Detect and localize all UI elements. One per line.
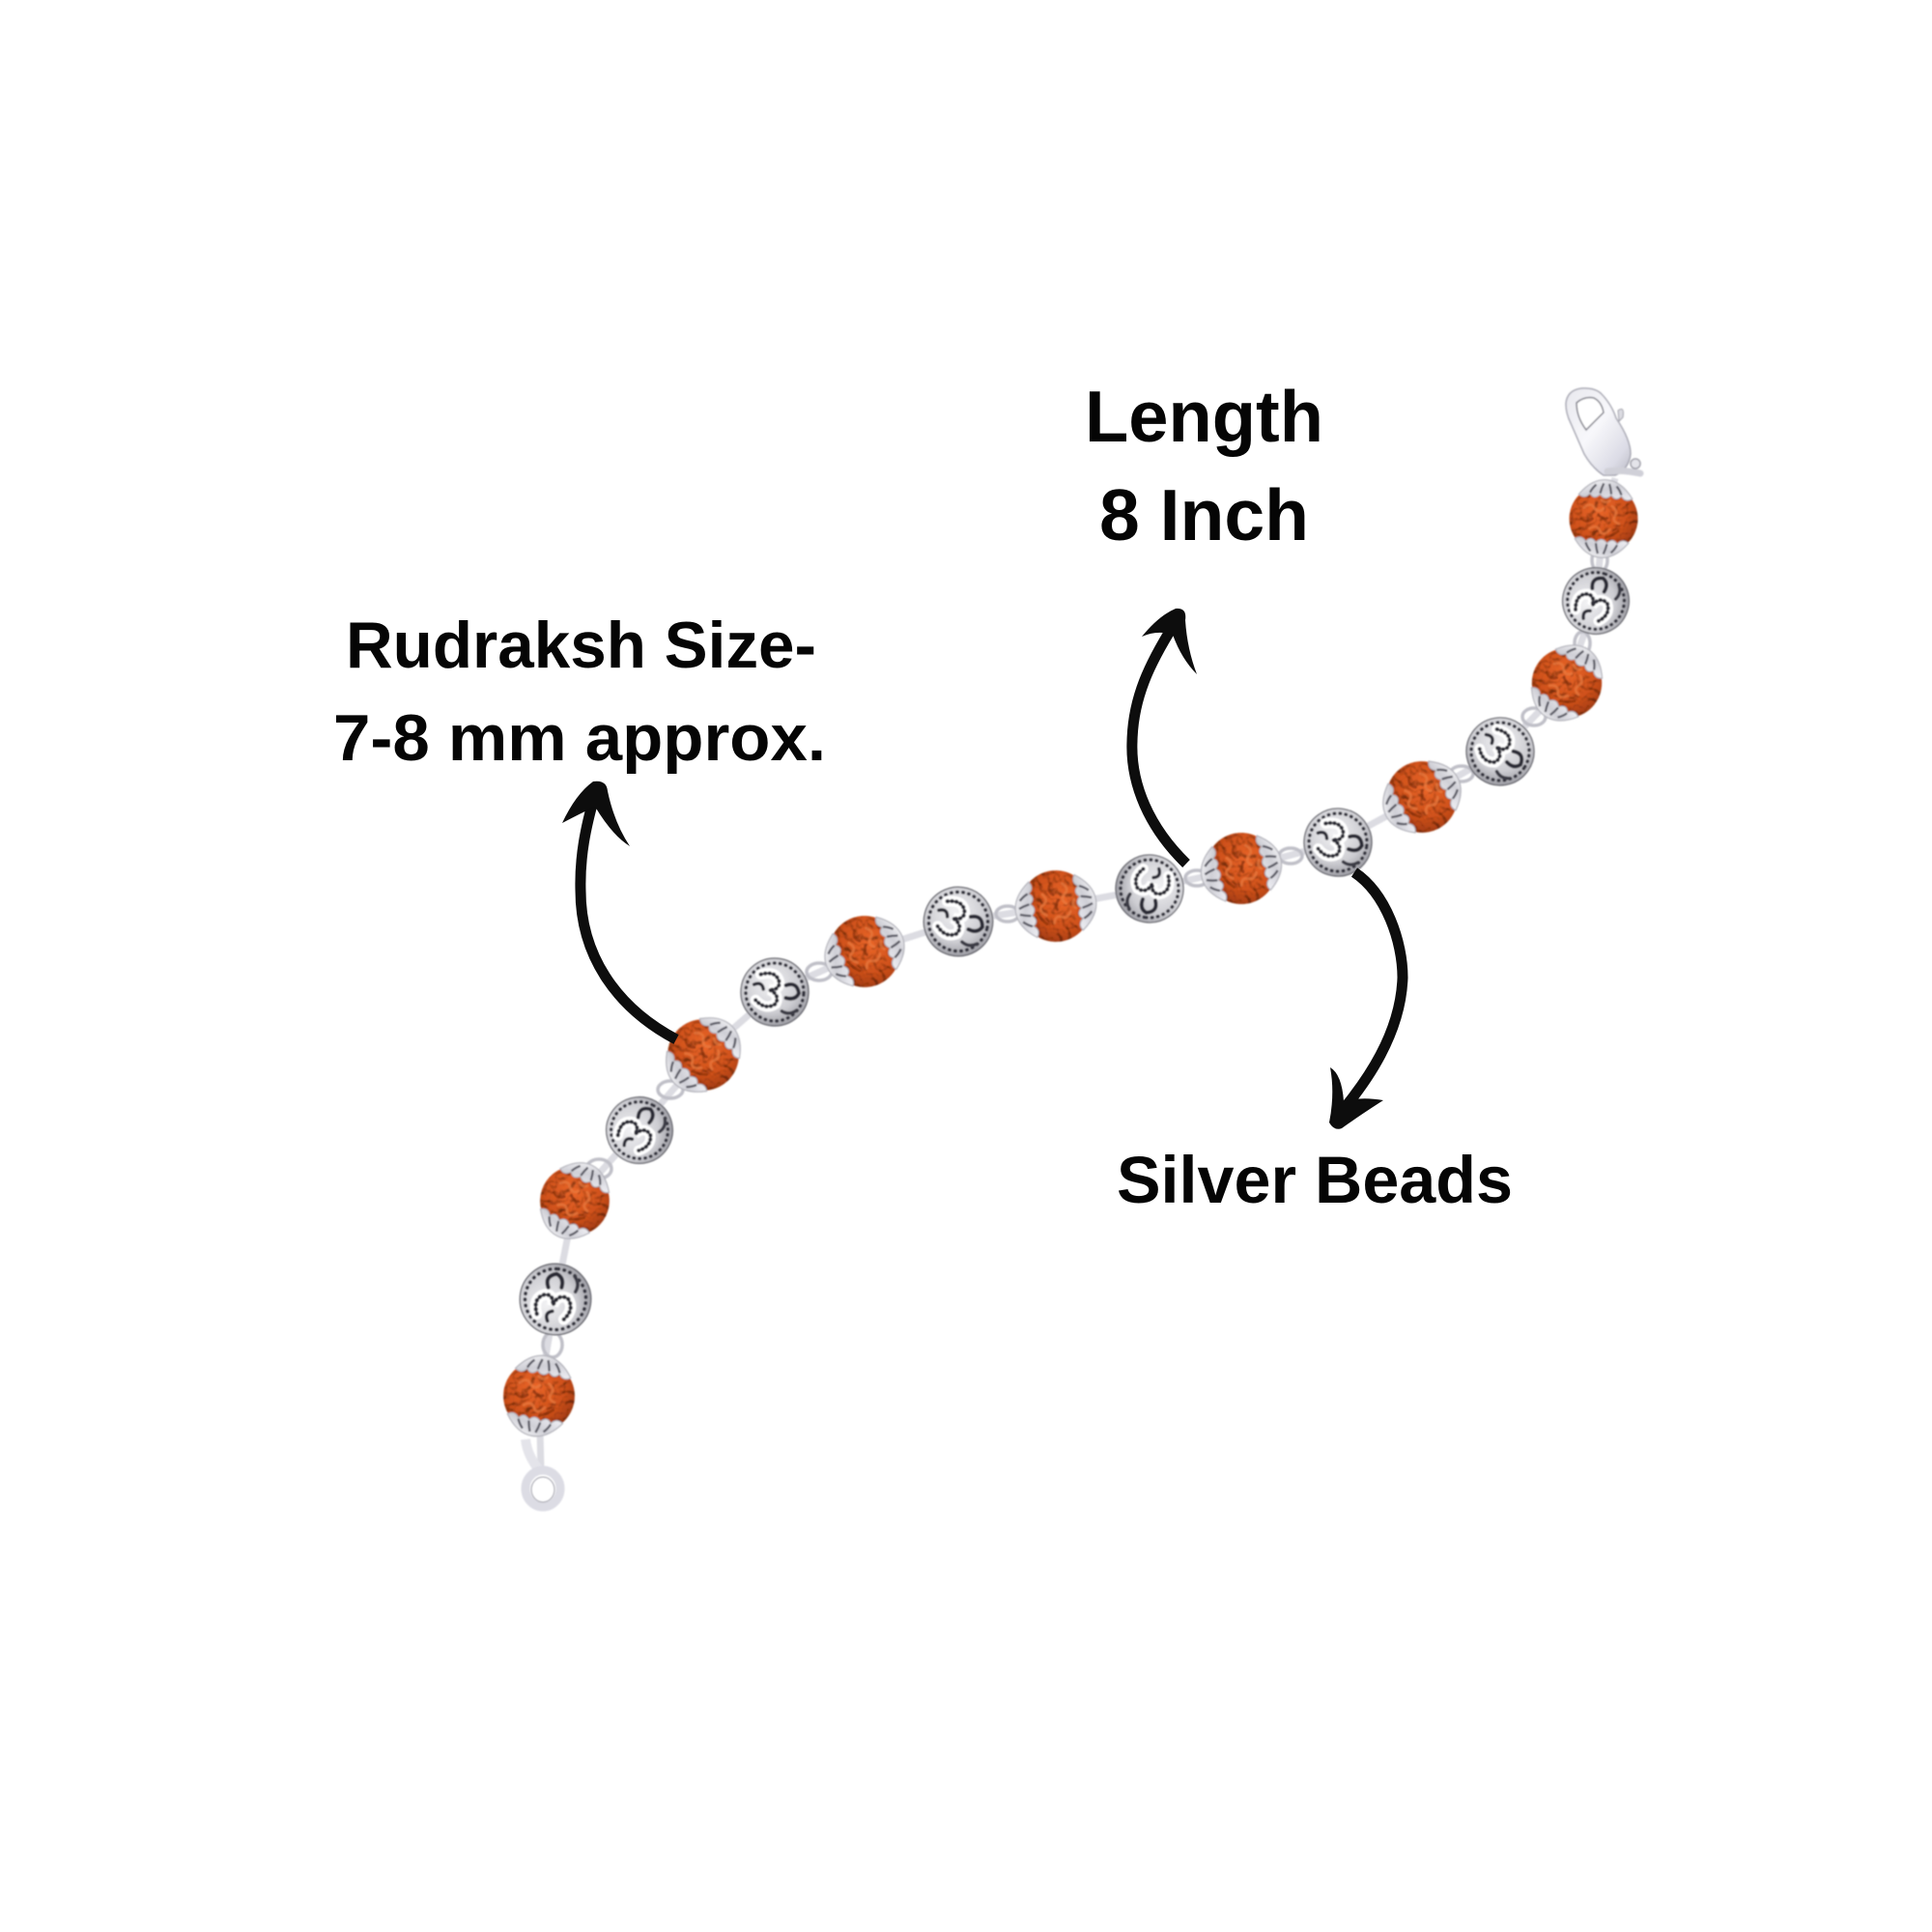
rudraksha bead 9 <box>1566 477 1641 560</box>
end ring <box>526 1439 560 1507</box>
label: silver beads: Silver Beads <box>1117 1143 1513 1217</box>
silver bead 3 <box>738 955 811 1029</box>
chain links <box>539 478 1615 1468</box>
lobster clasp <box>1566 388 1640 475</box>
silver bead 5 <box>1110 849 1189 928</box>
rudraksha bead 2 <box>526 1151 623 1251</box>
silver bead 8 <box>1553 558 1638 643</box>
arrow: rudraksh size <box>562 781 676 1039</box>
rudraksha bead 8 <box>1516 631 1618 735</box>
rudraksha bead 4 <box>814 903 915 1000</box>
silver bead 6 <box>1298 803 1378 882</box>
silver bead 2 <box>594 1085 685 1176</box>
label: length: Length <box>1085 376 1323 457</box>
rudraksha bead 7 <box>1369 746 1475 848</box>
label: length value: 8 Inch <box>1099 474 1309 555</box>
rudraksha bead 3 <box>649 1001 757 1109</box>
label: rudraksh size value: 7-8 mm approx. <box>333 701 826 775</box>
silver bead 4 <box>916 879 1001 964</box>
arrow: length <box>1132 609 1197 864</box>
arrow: silver beads <box>1329 872 1403 1129</box>
rudraksha bead 5 <box>1010 865 1101 948</box>
silver bead 1 <box>517 1261 594 1338</box>
silver bead 7 <box>1453 704 1548 799</box>
rudraksha bead 6 <box>1193 824 1290 913</box>
bracelet <box>497 388 1641 1507</box>
label: rudraksh size: Rudraksh Size- <box>346 609 816 682</box>
rudraksha bead 1 <box>497 1350 582 1442</box>
